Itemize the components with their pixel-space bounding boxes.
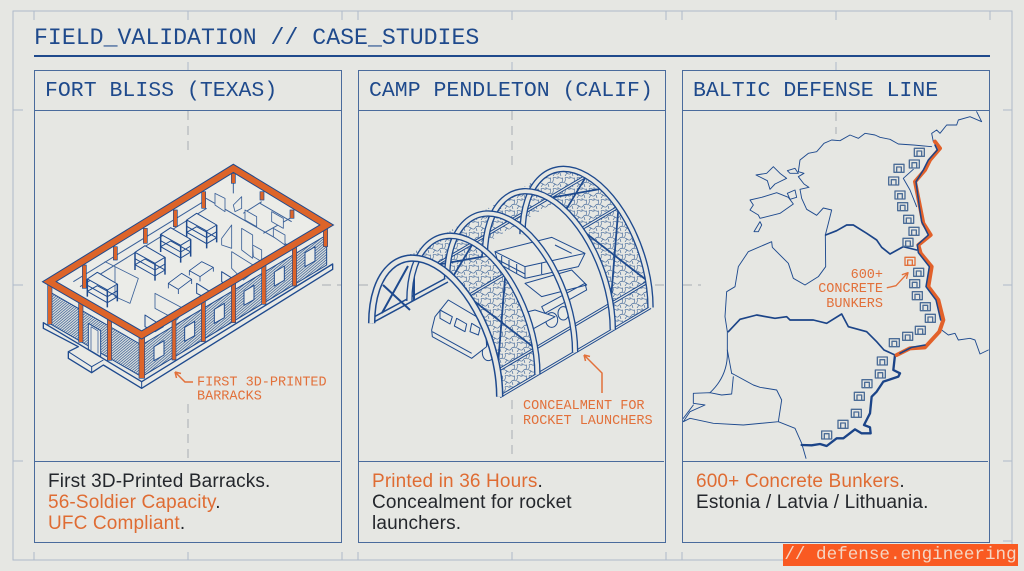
highlighted bunker marker [905,257,915,265]
illustration: isometric barracks [42,111,341,458]
callout: 600+ concrete bunkers: CONCRETE [818,282,883,297]
description: Camp Pendleton: Printed in 36 Hours. [372,471,543,492]
rails and cross braces [436,176,650,397]
callout: first 3D-printed barracks: FIRST 3D-PRINTED [197,376,327,390]
concrete slab and entry step [43,264,333,388]
bunk beds [87,213,235,332]
arrow: bunkers callout [887,273,908,288]
orange eastern frontier [897,142,943,355]
navy frontier overlay [900,145,941,353]
Lithuania-Belarus border [802,355,900,446]
callout: first 3D-printed barracks [197,376,327,404]
description: Fort Bliss: UFC Compliant. [48,513,185,534]
description: Baltic Defense Line [683,461,988,542]
illustration: arched shelter over rocket launcher [359,111,664,454]
heading: Baltic Defense Line [683,71,989,111]
heading: Fort Bliss [35,71,341,111]
callout: 600+ concrete bunkers: BUNKERS [826,297,883,312]
callout: concealment for rocket launchers: ROCKET LAUNCHERS [523,414,653,429]
description: Fort Bliss [35,461,340,542]
illustration: Baltic states map [683,111,989,459]
description: Camp Pendleton: launchers. [372,513,461,534]
heading: Camp Pendleton [359,71,665,111]
bunker markers [822,148,935,439]
callout: concealment for rocket launchers [523,399,653,429]
description: Baltic Defense Line: 600+ Concrete Bunkers. [696,471,905,492]
description: Camp Pendleton [359,461,664,542]
description: Camp Pendleton: Concealment for rocket [372,492,572,513]
panel: Fort Bliss [34,70,342,543]
panel: Baltic Defense Line [682,70,990,543]
hatched front walls [49,235,327,377]
mesh shell panels [396,170,650,397]
callout: 600+ concrete bunkers [818,268,883,312]
orange roof beam [49,168,327,335]
title: FIELD_VALIDATION // CASE_STUDIES [34,25,479,51]
heading: Camp Pendleton: CAMP PENDLETON (CALIF) [369,79,653,103]
callout: first 3D-printed barracks: BARRACKS [197,390,262,404]
orange posts [48,173,328,378]
rear side framing [372,262,448,323]
arrow: concealment callout [584,355,602,393]
callout: concealment for rocket launchers: CONCEALMENT FOR [523,399,645,414]
rocket launcher truck [432,237,587,361]
arrow: barracks callout [175,372,193,382]
heading: Baltic Defense Line: BALTIC DEFENSE LINE [693,79,938,103]
arches [372,169,650,397]
national borders [728,225,917,355]
heading: Fort Bliss: FORT BLISS (TEXAS) [45,79,277,103]
footer tag: // defense.engineering [784,545,1017,565]
description: Fort Bliss: 56-Soldier Capacity. [48,492,221,513]
description: Baltic Defense Line: Estonia / Latvia / Lithuania. [696,492,928,513]
callout: 600+ concrete bunkers: 600+ [851,268,883,283]
coastlines and outer borders [683,112,988,458]
title [34,23,990,57]
panel: Camp Pendleton [358,70,666,543]
interior floor and rooms [49,168,327,377]
description: Fort Bliss: First 3D-Printed Barracks. [48,471,270,492]
